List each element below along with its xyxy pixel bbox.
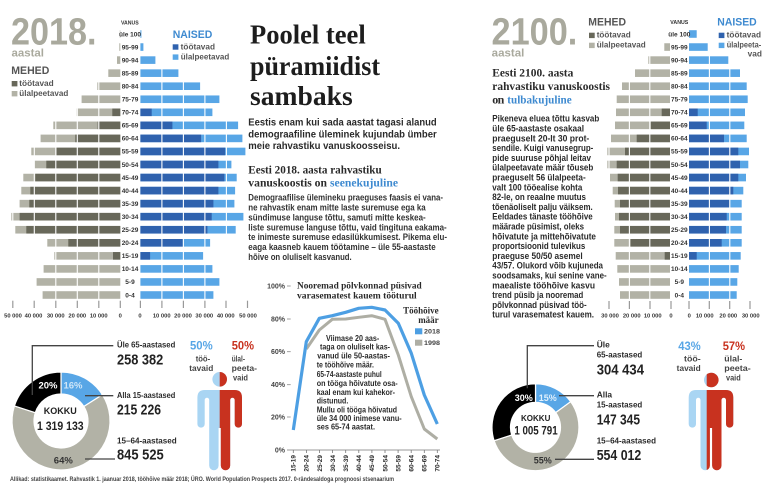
heading: 2100: 2100. xyxy=(492,12,577,54)
chart annotation: Mullu oli tööga hõivatud xyxy=(317,404,397,414)
age labels 2100: 60-64 xyxy=(671,136,688,143)
intro text: Eestis enam kui sada aastat tagasi alanud xyxy=(248,118,437,129)
body text 2018: Demograafilise ülemineku praeguses faasis ei vana- xyxy=(248,193,443,203)
donut chart 2100 xyxy=(492,384,579,471)
age labels 2100: 70-74 xyxy=(671,110,688,117)
women employed 2018 xyxy=(140,108,225,260)
donut chart 2018: 64% xyxy=(54,456,73,466)
men employed 2018 xyxy=(20,108,120,260)
age labels 2100: 85-89 xyxy=(671,70,688,77)
body text 2100: hõivatute ja mittehõivatute xyxy=(492,231,596,242)
x axis: 15-19 xyxy=(291,455,298,472)
body text 2018: te inimeste suremuse edasilükkumisest. Pikema elu- xyxy=(248,232,447,242)
x axis xyxy=(287,450,442,472)
age labels 2018: 55-59 xyxy=(122,149,139,156)
person share 2100 xyxy=(677,339,751,470)
title: püramiidist xyxy=(250,51,380,81)
subheading 2018: seenekujuline xyxy=(330,176,399,190)
chart legend xyxy=(403,305,440,347)
x axis: 35-39 xyxy=(343,455,350,472)
age labels 2100: 80-84 xyxy=(671,84,688,90)
person share 2100: peeta- xyxy=(724,364,751,373)
axis 2100: 0 xyxy=(669,313,673,319)
age labels 2100: üle 100 xyxy=(668,31,691,38)
age labels 2100: 25-29 xyxy=(671,227,688,234)
body text 2100: pide suuruse põhjal leitav xyxy=(492,153,592,164)
donut values 2100: Üle xyxy=(597,340,610,350)
axis 2018: 40 000 xyxy=(217,313,235,319)
age labels 2018: 35-39 xyxy=(122,201,139,208)
body text 2100: proportsioonid tulevikus xyxy=(492,241,585,252)
donut chart 2100: KOKKU xyxy=(521,414,551,423)
body text 2100: praeguselt 56 ülalpeeta- xyxy=(492,172,586,184)
x axis: 60-64 xyxy=(408,455,416,472)
body text 2100: ülalpeetavate määr tõuseb xyxy=(492,163,593,174)
age labels 2018: 10-14 xyxy=(122,266,139,273)
donut values 2100: 304 434 xyxy=(597,362,644,378)
donut values 2018 xyxy=(117,340,177,464)
age labels 2100: 55-59 xyxy=(671,149,688,156)
age labels 2100: 95-99 xyxy=(671,44,688,51)
y axis: 20% xyxy=(271,414,286,422)
axis 2100: 0 xyxy=(688,313,691,319)
chart: population pyramid 2018 xyxy=(4,20,257,319)
men dependants 2100 xyxy=(607,43,670,299)
chart title: Nooremad põlvkonnad püsivad xyxy=(297,281,422,292)
axis 2100: 10 000 xyxy=(644,313,662,319)
body text 2018 xyxy=(248,193,447,262)
y axis xyxy=(267,284,291,454)
body text 2100: praeguselt 20-lt 30 prot- xyxy=(492,133,589,144)
donut values 2018: 258 382 xyxy=(117,353,163,369)
age labels 2018: 0-4 xyxy=(125,292,135,299)
donut values 2018: Üle 65-aastased xyxy=(117,340,175,350)
donut chart 2100: 30% xyxy=(515,393,533,403)
age labels 2018: üle 100 xyxy=(119,31,141,38)
y axis: 0% xyxy=(275,448,286,454)
x axis: 30-34 xyxy=(330,455,337,472)
subheading 2100: rahvastiku vanuskoostis xyxy=(492,79,610,93)
age labels 2100: 50-54 xyxy=(671,162,688,169)
age labels 2100: 35-39 xyxy=(671,201,688,208)
body text 2100: üle 65-aastaste osakaal xyxy=(492,124,584,134)
chart annotation: 65-74-aastaste puhul xyxy=(317,369,382,379)
axis 2018: 0 xyxy=(138,313,142,319)
icon: person 2100 xyxy=(689,373,733,470)
donut values 2100: 554 012 xyxy=(597,448,641,464)
legend: women 2018: ülalpeetavad xyxy=(181,53,229,62)
legend: women 2100: vad xyxy=(748,50,762,59)
x axis: 55-59 xyxy=(395,455,402,472)
axis 2018: 50 000 xyxy=(239,313,257,319)
legend: men 2018: ülalpeetavad xyxy=(19,89,68,98)
age labels 2018: 5-9 xyxy=(125,279,135,286)
axis 2018: 50 000 xyxy=(4,313,22,319)
heading: 2018: aastal xyxy=(12,48,44,60)
line chart: employment rate xyxy=(267,281,442,472)
axis 2100: 10 000 xyxy=(696,313,714,319)
age labels 2018: 75-79 xyxy=(122,96,139,104)
women employed 2100 xyxy=(689,108,740,260)
donut chart 2018 xyxy=(12,372,110,470)
body text 2100: Pikeneva eluea tõttu kasvab xyxy=(492,114,599,125)
age labels 2018: 95-99 xyxy=(122,44,139,51)
age labels 2018: VANUS xyxy=(121,20,139,26)
axis 2100: 20 000 xyxy=(623,313,641,319)
body text 2018: liste suremuse languse tõttu, vaid tingituna eakama- xyxy=(248,222,447,232)
legend: men 2018 xyxy=(11,65,68,98)
legend: women 2018: NAISED xyxy=(173,29,212,41)
women dependants 2018 xyxy=(140,30,245,299)
axis 2100 xyxy=(601,301,760,319)
person share 2018: tavaid xyxy=(189,364,213,373)
axis 2018 xyxy=(4,301,257,319)
chart annotation: vanud üle 50-aastas- xyxy=(317,351,390,361)
body text 2100 xyxy=(492,114,607,321)
line: 2018 xyxy=(293,307,437,430)
heading: 2018: 2018. xyxy=(11,12,96,54)
legend: men 2100 xyxy=(588,17,646,49)
age labels 2018: 20-24 xyxy=(122,240,139,247)
title: Poolel teel xyxy=(250,19,366,49)
age labels 2100: 40-44 xyxy=(671,188,688,195)
intro text xyxy=(248,118,437,152)
age labels 2100 xyxy=(668,20,691,299)
legend: women 2100: töötavad xyxy=(727,31,761,40)
axis 2018: 10 000 xyxy=(153,313,171,319)
chart legend: määr xyxy=(418,315,439,325)
donut values 2100: 15-aastased xyxy=(597,400,642,410)
axis 2100: 30 000 xyxy=(742,313,760,319)
donut chart 2018: 16% xyxy=(63,380,83,392)
age labels 2018: 15-19 xyxy=(122,253,139,260)
person share 2018: 50% xyxy=(190,338,213,352)
body text 2100: trend püsib ja nooremad xyxy=(492,290,583,301)
age labels 2018: 90-94 xyxy=(122,57,139,64)
donut values 2100 xyxy=(597,340,656,464)
chart: population pyramid 2100 xyxy=(601,20,760,319)
body text 2100: põlvkonnad püsivad töö- xyxy=(492,300,587,311)
age labels 2018: 80-84 xyxy=(122,84,139,90)
y axis: 80% xyxy=(271,316,286,324)
age labels 2018 xyxy=(119,20,141,299)
age labels 2018: 85-89 xyxy=(122,70,139,77)
age labels 2100: 5-9 xyxy=(675,279,684,286)
chart annotation: kaal enam kui kahekor- xyxy=(317,387,395,397)
person share 2018: töö- xyxy=(196,355,211,364)
x axis: 25-29 xyxy=(317,455,324,472)
chart title xyxy=(297,281,422,301)
age labels 2018: 30-34 xyxy=(122,214,139,221)
donut chart 2100: 55% xyxy=(534,455,552,465)
axis 2018: 20 000 xyxy=(174,313,192,319)
age labels 2100: 10-14 xyxy=(671,266,688,273)
donut chart 2100: 15% xyxy=(539,393,557,403)
women dependants 2100 xyxy=(689,30,749,299)
legend: women 2018: töötavad xyxy=(181,42,215,51)
age labels 2100: 15-19 xyxy=(671,253,688,260)
legend: men 2018: töötavad xyxy=(19,79,54,88)
body text 2100: praeguse 50/50 asemel xyxy=(492,251,583,262)
donut chart 2018: 1 319 133 xyxy=(37,419,84,433)
body text 2100: 43/57. Olukord võib kujuneda xyxy=(492,261,604,272)
donut values 2100: 147 345 xyxy=(597,412,640,428)
body text 2018: ne rahvastik enam mitte laste suremuse ega ka xyxy=(248,202,426,212)
axis 2018: 30 000 xyxy=(195,313,213,319)
body text 2100: maealiste tööhõive kasvu xyxy=(492,280,595,291)
subheading 2100: Eesti 2100. aasta xyxy=(492,66,573,80)
legend: women 2100 xyxy=(717,17,762,59)
donut values 2018: 845 525 xyxy=(117,448,164,464)
chart annotation: Viimase 20 aas- xyxy=(326,333,379,343)
subheading 2018 xyxy=(248,162,399,190)
chart legend: 1998 xyxy=(424,340,440,347)
legend: women 2100: NAISED xyxy=(717,17,757,29)
x axis: 65-69 xyxy=(422,455,429,472)
chart annotation: te tööhõive määr. xyxy=(317,360,374,370)
body text 2100: 82-le, on reaalne muutus xyxy=(492,192,586,203)
age labels 2018: 70-74 xyxy=(122,110,139,117)
icon: person 2018 xyxy=(197,372,242,470)
axis 2100: 30 000 xyxy=(601,313,619,319)
axis 2018: 0 xyxy=(119,313,122,319)
body text 2018: hõive on oluliselt kasvanud. xyxy=(248,252,352,262)
donut values 2100: 15–64-aastased xyxy=(597,435,656,445)
person share 2100: töö- xyxy=(684,355,701,364)
title: sambaks xyxy=(250,81,353,111)
chart annotation xyxy=(317,333,402,432)
legend: men 2100: MEHED xyxy=(588,17,626,29)
age labels 2018: 45-49 xyxy=(122,175,139,182)
person share 2100: vaid xyxy=(726,374,741,383)
legend: men 2100: töötavad xyxy=(597,31,631,40)
chart annotation: üle 34 000 inimese vanu- xyxy=(317,413,402,423)
x axis: 20-24 xyxy=(304,455,311,472)
age labels 2100: 65-69 xyxy=(671,123,688,130)
donut chart 2018: 20% xyxy=(38,380,58,392)
body text 2018: sündimuse languse tõttu, samuti mitte keskea- xyxy=(248,212,426,222)
x axis: 50-54 xyxy=(382,455,389,472)
body text 2100: soodsamaks, kui senine vane- xyxy=(492,270,607,282)
body text 2100: määrade püsimist, oleks xyxy=(492,222,584,232)
chart annotation: distunud. xyxy=(317,395,348,405)
subheading 2018: Eesti 2018. aasta rahvastiku xyxy=(248,162,382,176)
axis 2100: 20 000 xyxy=(719,313,737,319)
line: 1998 xyxy=(306,316,437,439)
age labels 2100: 0-4 xyxy=(675,292,684,299)
chart annotation: ses 65-74 aastat. xyxy=(317,422,375,432)
donut leader lines 2100 xyxy=(527,346,594,459)
age labels 2100: 45-49 xyxy=(671,175,688,182)
y axis: 100% xyxy=(267,284,286,290)
heading: 2100: aastal xyxy=(492,48,524,60)
person share 2018: peeta- xyxy=(232,364,257,373)
legend: men 2018: MEHED xyxy=(11,65,49,77)
subheading 2018: vanuskoostis on xyxy=(248,176,327,190)
subheading 2100 xyxy=(492,66,610,106)
x axis: 70-74 xyxy=(435,455,442,472)
body text 2100: turul varasematest kauem. xyxy=(492,310,594,321)
person share 2100: ülal- xyxy=(724,355,743,364)
age labels 2100: 90-94 xyxy=(671,57,688,64)
body text 2100: Eeldades tänaste tööhõive xyxy=(492,212,593,223)
donut chart 2018: KOKKU xyxy=(44,406,77,416)
body text 2100: tõenäoliselt palju väiksem. xyxy=(492,202,593,213)
intro text: meie rahvastiku vanuskoosseisu. xyxy=(248,141,400,152)
age labels 2100: 20-24 xyxy=(671,240,688,247)
legend: men 2100: ülalpeetavad xyxy=(597,40,646,49)
age labels 2018: 40-44 xyxy=(122,188,139,195)
donut values 2018: Alla 15-aastased xyxy=(117,390,175,400)
person share 2018: vaid xyxy=(233,374,248,383)
sources footer: Allikad: statistikaamet. Rahvastik 1. jaanuar 2018, tööhõive määr 2018; ÜRO. World Population Prospects 2017. 0-rändesaldoga prognoosi stsenaarium xyxy=(10,476,394,483)
person share 2100: 57% xyxy=(723,339,745,353)
age labels 2018: 60-64 xyxy=(122,136,139,143)
age labels 2100: VANUS xyxy=(670,20,689,26)
axis 2018: 20 000 xyxy=(68,313,86,319)
legend: women 2100: ülalpeeta- xyxy=(727,40,761,49)
intro text: demograafiline üleminek kujundab ümber xyxy=(248,129,437,140)
person share 2100: 43% xyxy=(678,339,701,353)
title xyxy=(250,19,380,111)
men dependants 2018 xyxy=(11,30,120,299)
axis 2018: 10 000 xyxy=(90,313,108,319)
age labels 2100: 75-79 xyxy=(671,96,688,104)
age labels 2018: 50-54 xyxy=(122,162,139,169)
age labels 2018: 25-29 xyxy=(122,227,139,234)
men employed 2100 xyxy=(617,108,670,260)
legend: women 2018 xyxy=(173,29,229,62)
donut values 2018: 15–64-aastased xyxy=(117,435,177,445)
person share 2018: 50% xyxy=(232,338,254,352)
chart legend: 2018 xyxy=(424,329,440,336)
age labels 2100: 30-34 xyxy=(671,214,688,221)
y axis: 60% xyxy=(271,349,286,356)
subheading 2100: on xyxy=(492,92,505,106)
body text 2100: sendile. Kuigi vanusegrup- xyxy=(492,143,593,154)
axis 2018: 30 000 xyxy=(47,313,65,319)
axis 2018: 40 000 xyxy=(25,313,42,319)
person share 2018: ülal- xyxy=(232,355,245,364)
y axis: 40% xyxy=(271,382,286,389)
donut values 2018: 215 226 xyxy=(117,403,161,419)
donut values 2100: Alla xyxy=(597,390,612,400)
chart legend: Tööhõive xyxy=(403,305,439,315)
body text 2100: valt 100 tööealise kohta xyxy=(492,182,583,193)
age labels 2018: 65-69 xyxy=(122,123,139,130)
chart annotation: taga on oluliselt kas- xyxy=(320,342,390,352)
donut chart 2100: 1 005 791 xyxy=(514,426,558,438)
subheading 2100: tulbakujuline xyxy=(507,92,572,106)
chart annotation: on tööga hõivatute osa- xyxy=(317,378,398,388)
x axis: 45-49 xyxy=(369,455,376,472)
donut values 2100: 65-aastased xyxy=(597,349,642,359)
body text 2018: eaga kaasneb kauem töötamine – üle 55-aastaste xyxy=(248,242,436,252)
x axis: 40-44 xyxy=(356,455,363,472)
chart title: varasematest kauem tööturul xyxy=(297,290,417,301)
person share 2018 xyxy=(189,338,257,470)
donut leader lines 2018 xyxy=(32,346,115,459)
person share 2100: tavaid xyxy=(677,364,701,373)
